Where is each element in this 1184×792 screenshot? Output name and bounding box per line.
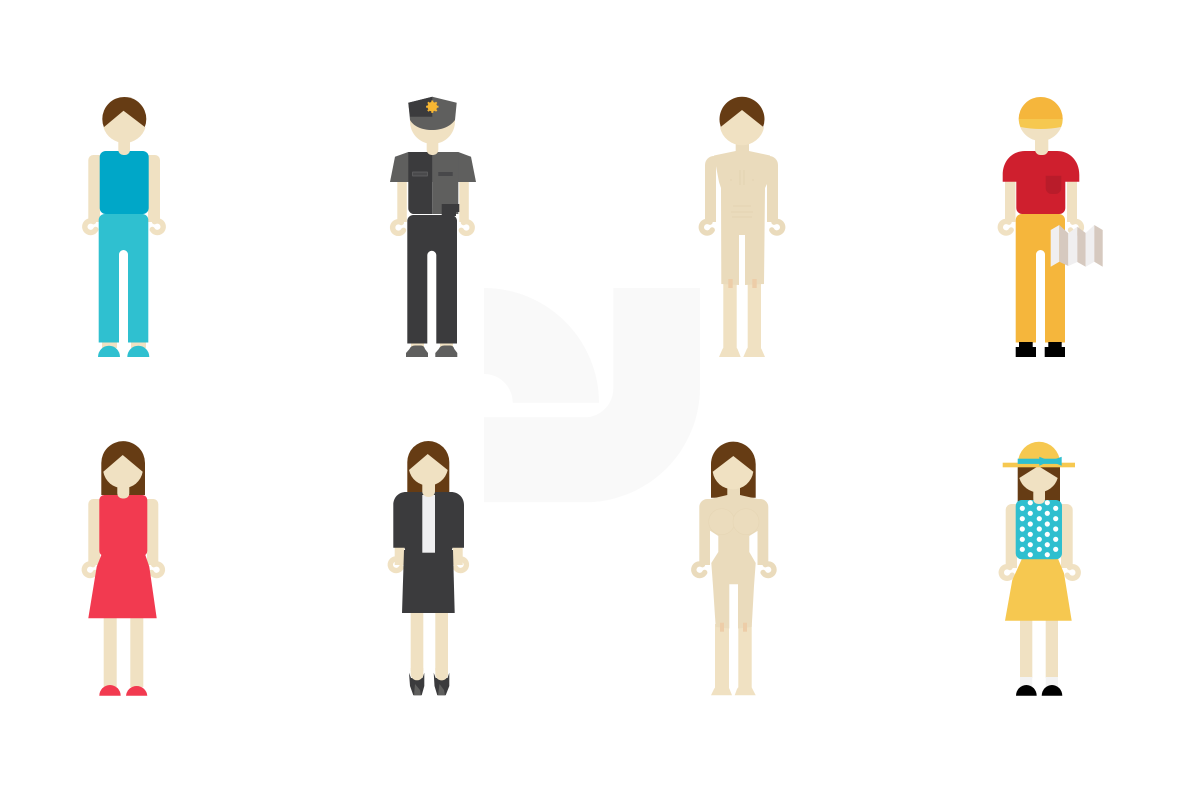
shoes: [1016, 342, 1065, 357]
neck: [117, 480, 129, 498]
hair: [711, 442, 756, 498]
badge: [426, 100, 438, 113]
hair: [1018, 465, 1060, 502]
tank top: [100, 151, 149, 214]
polka-dot top: [1016, 500, 1062, 559]
hair: [101, 441, 145, 495]
uniform shirt: [390, 152, 476, 214]
legs: [1020, 618, 1058, 678]
shoes: [98, 346, 149, 357]
shirt pocket: [1046, 176, 1061, 194]
knee marks: [728, 279, 757, 288]
trousers: [407, 215, 457, 344]
yellow skirt: [1005, 557, 1072, 621]
neck: [118, 135, 130, 155]
figure: delivery man with map: [1000, 97, 1103, 357]
suit jacket: [393, 492, 464, 556]
arms and hands: [85, 155, 163, 233]
chest pockets: [413, 172, 453, 176]
holster: [442, 204, 459, 216]
figure: man in casual blue outfit: [85, 97, 163, 357]
trousers: [99, 214, 148, 342]
trousers: [1016, 214, 1065, 342]
hair: [102, 97, 146, 141]
cap: [1019, 97, 1063, 129]
figure: woman in red dress: [84, 441, 162, 696]
figure: police officer: [390, 97, 476, 357]
arms and hands: [1000, 180, 1081, 233]
arms and hands: [393, 180, 472, 233]
hair: [407, 441, 449, 494]
neck: [727, 482, 740, 498]
face: [1019, 97, 1063, 141]
red dress: [88, 495, 157, 618]
knee marks: [720, 623, 747, 632]
police cap: [408, 97, 457, 130]
shoes: [1016, 685, 1062, 696]
legs: [411, 611, 448, 671]
figure: unclothed man anatomy: [701, 97, 783, 357]
watermark logo: [484, 288, 700, 502]
neck: [736, 135, 749, 155]
neck: [1033, 488, 1045, 504]
face: [720, 110, 764, 145]
flower dots: [1020, 500, 1058, 557]
face: [409, 454, 448, 486]
folded map: [1051, 225, 1103, 267]
arms and hands: [390, 545, 466, 571]
face: [1019, 466, 1058, 492]
chest and abdomen lines: [730, 170, 754, 217]
face: [713, 456, 753, 489]
feet: [719, 346, 765, 357]
torso and thighs: [714, 151, 770, 285]
face: [104, 111, 146, 143]
torso, hips and thighs: [706, 495, 762, 628]
face: [410, 99, 455, 144]
red t-shirt: [1003, 151, 1079, 214]
feet: [711, 686, 756, 695]
figure: unclothed woman anatomy: [694, 442, 774, 695]
arms and hands: [1001, 504, 1078, 578]
shoes: [406, 341, 457, 357]
neck: [422, 480, 435, 497]
ankles: [102, 340, 146, 348]
socks: [1020, 677, 1058, 687]
shins: [723, 282, 761, 349]
legs: [104, 616, 143, 687]
sun hat: [1003, 442, 1075, 467]
shoes: [99, 685, 147, 696]
arms and hands: [701, 156, 783, 233]
skirt: [402, 550, 455, 613]
neck: [1035, 135, 1048, 155]
high heels: [409, 668, 449, 695]
white shirt: [422, 495, 435, 553]
arms and hands: [84, 499, 162, 576]
shins: [715, 624, 752, 688]
figure: woman with sun hat and polka-dot top: [1001, 442, 1078, 696]
neck: [427, 135, 438, 155]
face: [103, 455, 143, 488]
figure: businesswoman in black suit: [390, 441, 466, 695]
hair: [720, 97, 764, 142]
arms and hands: [694, 499, 774, 576]
hat ribbon and bow: [1018, 457, 1062, 466]
chest: [709, 509, 759, 535]
